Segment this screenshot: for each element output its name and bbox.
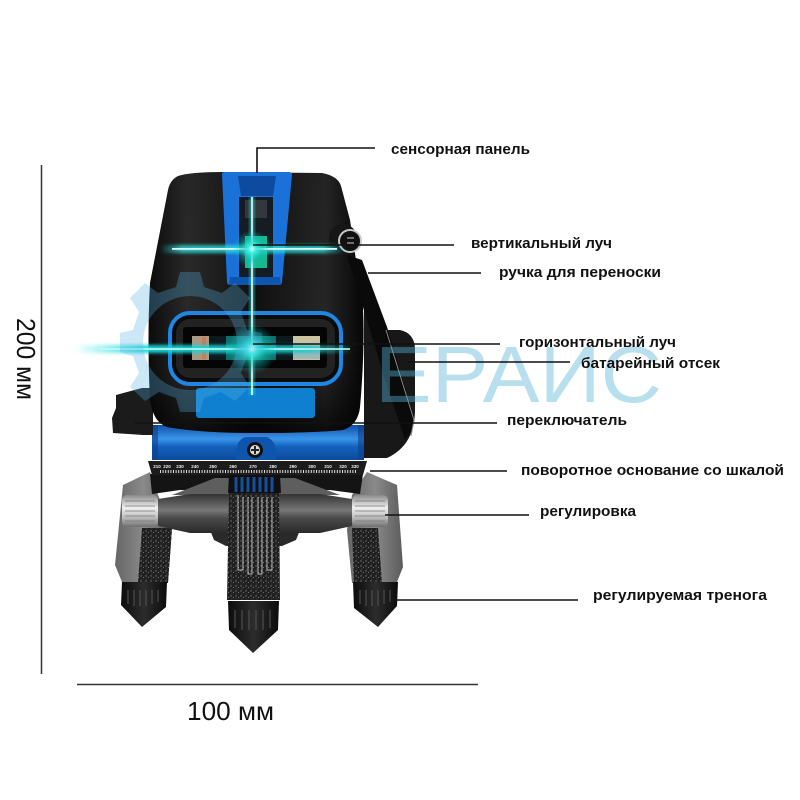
center tripod leg — [227, 475, 281, 653]
scale ring: 230 — [176, 464, 184, 469]
scale ring: 300 — [308, 464, 316, 469]
label: switch: переключатель — [507, 412, 627, 429]
scale ring: 310 — [324, 464, 332, 469]
blue rotating base — [152, 425, 364, 460]
dimension line: height — [40, 165, 42, 674]
horizontal laser window — [170, 313, 341, 384]
lower horizontal beam — [75, 345, 350, 353]
left tripod leg — [115, 472, 172, 627]
scale ring: 330 — [351, 464, 359, 469]
upper beam crossing glow — [233, 230, 271, 268]
vertical beam — [250, 197, 254, 395]
label: adjustment: регулировка — [540, 503, 637, 520]
label: battery compartment: батарейный отсек — [581, 355, 720, 372]
right tripod leg — [347, 472, 403, 627]
scale ring: 220 — [163, 464, 171, 469]
blue label plate — [196, 388, 315, 418]
label: rotating base with scale: поворотное основание со шкалой — [521, 462, 784, 479]
scale ring: 290 — [289, 464, 297, 469]
label: horizontal beam: горизонтальный луч — [519, 334, 676, 351]
left adjustment knob — [122, 495, 158, 527]
watermark: gear — [120, 272, 262, 412]
upper tripod plate — [150, 474, 363, 494]
label: touch panel: сенсорная панель — [391, 141, 530, 158]
dimension label: 200 mm: 200 мм — [11, 318, 41, 400]
carrying handle — [329, 224, 414, 440]
scale ring — [148, 461, 367, 475]
handle pivot — [329, 224, 361, 252]
scale ring: 210 — [153, 464, 161, 469]
label: adjustable tripod: регулируемая тренога — [593, 587, 768, 604]
scale ring: 240 — [191, 464, 199, 469]
watermark: brand text: ЕРАИС — [375, 330, 662, 419]
switch knob — [112, 388, 153, 435]
dimension label: 100 mm: 100 мм — [187, 696, 274, 726]
laser beams — [75, 197, 350, 395]
right adjustment knob — [352, 495, 388, 527]
lower beam crossing glow — [227, 324, 277, 374]
scale ring: 250 — [209, 464, 217, 469]
scale ring: 260 — [229, 464, 237, 469]
base screw — [247, 442, 263, 458]
tripod base — [115, 472, 403, 653]
top blue touch panel — [222, 172, 292, 285]
scale ring: 280 — [269, 464, 277, 469]
upper horizontal beam — [160, 245, 345, 253]
main housing — [148, 172, 364, 433]
scale ring: 320 — [339, 464, 347, 469]
leader lines — [135, 148, 578, 600]
battery compartment — [364, 300, 415, 458]
lower hub — [210, 530, 300, 546]
cross bar — [158, 494, 352, 533]
label: carrying handle: ручка для переноски — [499, 264, 661, 281]
scale ring: 270 — [249, 464, 257, 469]
label: vertical beam: вертикальный луч — [471, 235, 612, 252]
laser level device — [75, 172, 415, 653]
dimension line: width — [77, 684, 478, 686]
